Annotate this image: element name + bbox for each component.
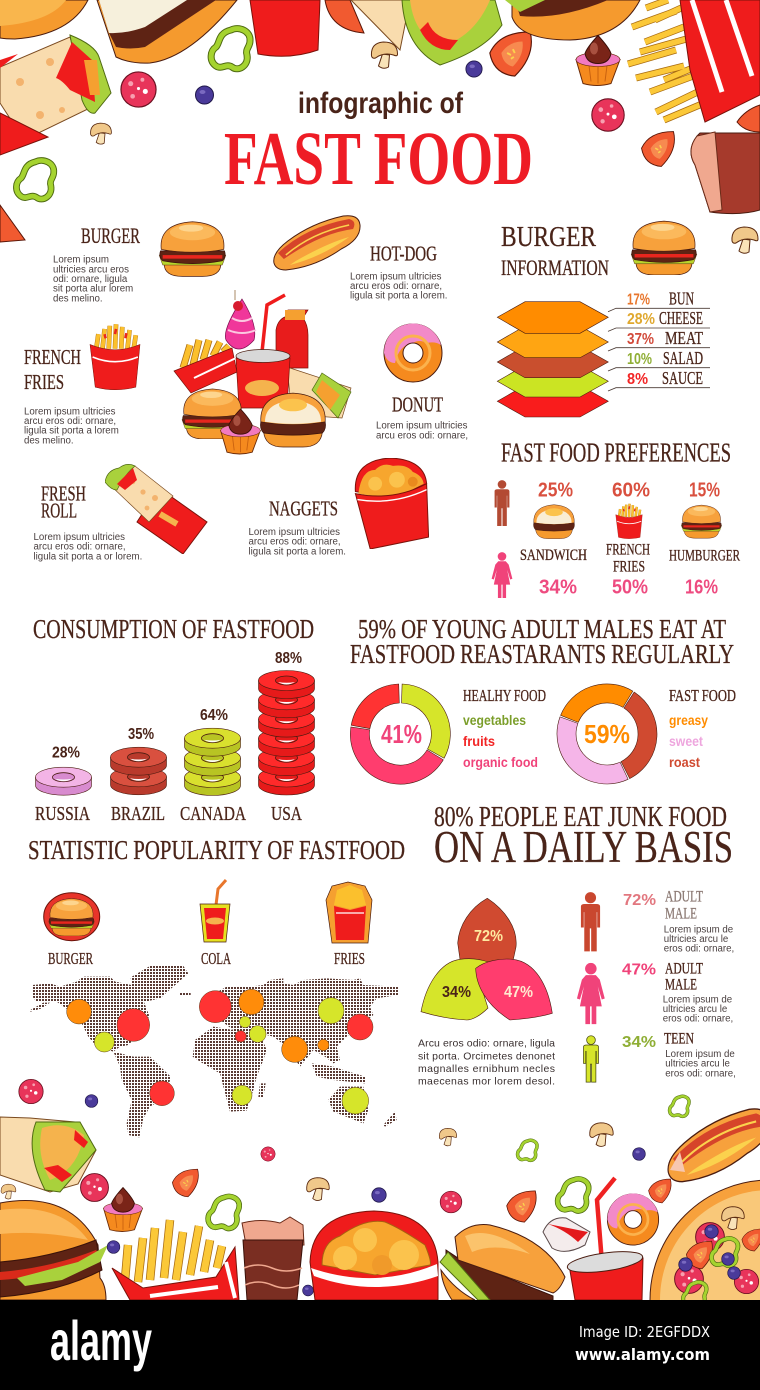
chart labels <box>627 288 703 388</box>
male percentages: 60% <box>612 480 650 502</box>
title <box>224 87 533 201</box>
panel: fast food preferences <box>492 438 740 598</box>
panel: burger information <box>497 221 710 417</box>
footer bar <box>0 1300 760 1390</box>
burger information heading <box>501 221 609 280</box>
french fries item: FRENCH <box>24 345 81 369</box>
donut chart: healthy food: 41% <box>381 719 422 749</box>
adult female row: MALE <box>665 976 697 993</box>
teen row: eros odi: ornare, <box>665 1068 736 1079</box>
adult male row <box>581 889 734 955</box>
donut item: DONUT <box>392 393 443 417</box>
burger item: odi: ornare, ligula <box>53 274 128 285</box>
icon: fries: FRIES <box>334 949 365 968</box>
Russia donut stack: RUSSIA <box>35 803 90 825</box>
adult male row: eros odi: ornare, <box>664 944 734 955</box>
chart labels: 28% <box>627 311 655 328</box>
food labels: FRIES <box>613 559 645 576</box>
french fries item: ligula sit porta a lorem <box>24 426 119 437</box>
petal chart paragraph: maecenas mor lorem desol. <box>418 1076 555 1088</box>
chart labels: SALAD <box>663 348 703 368</box>
hot-dog item: HOT-DOG <box>370 242 437 266</box>
petal chart <box>421 898 552 1020</box>
junk food heading <box>434 802 733 872</box>
icon: cheeseburger <box>631 221 697 275</box>
adult male row: MALE <box>665 905 697 922</box>
chart labels: SAUCE <box>662 368 703 388</box>
french fries item: arcu eros odi: ornare, <box>24 416 116 427</box>
stacked hexagon chart <box>497 302 608 417</box>
male percentages: 25% <box>538 480 573 502</box>
chart labels: MEAT <box>665 328 703 348</box>
alamy logo: alamy <box>50 1309 152 1372</box>
teen row: 34% <box>622 1034 656 1051</box>
USA donut stack <box>258 650 314 825</box>
teen row: Lorem ipsum de <box>665 1049 735 1060</box>
statistic heading: STATISTIC POPULARITY OF FASTFOOD <box>28 835 405 865</box>
adult male row: ultricies arcu le <box>664 934 728 945</box>
naggets item: Lorem ipsum ultricies <box>248 527 340 538</box>
healthy food legend: HEALHY FOOD <box>463 686 546 705</box>
icon: burger <box>44 893 100 968</box>
fast food legend: FAST FOOD <box>669 686 736 705</box>
fast food legend: greasy <box>669 712 708 728</box>
adult male row: Lorem ipsum de <box>664 925 733 936</box>
healthy food legend: fruits <box>463 733 495 749</box>
chart labels: 37% <box>627 331 654 348</box>
panel: consumption of fastfood <box>33 614 314 825</box>
Canada donut stack: 64% <box>200 707 228 724</box>
food icons <box>534 504 722 539</box>
naggets item: NAGGETS <box>269 496 338 520</box>
Brazil donut stack: BRAZIL <box>111 803 165 825</box>
adult female row: ADULT <box>665 960 703 977</box>
female percentages: 50% <box>612 576 648 598</box>
french fries item: FRIES <box>24 370 64 394</box>
donut item: arcu eros odi: ornare, <box>376 430 468 441</box>
food labels: FRENCH <box>606 541 650 558</box>
female percentages: 34% <box>539 576 577 598</box>
fresh roll item: ROLL <box>41 498 77 522</box>
naggets item: arcu eros odi: ornare, <box>248 537 341 548</box>
burger item: des melino. <box>53 293 103 304</box>
donut chart: fast food: 59% <box>584 719 630 749</box>
healthy food legend: vegetables <box>463 712 526 728</box>
petal chart paragraph: magnalles ernibhum necles <box>418 1063 555 1075</box>
chart labels: 10% <box>627 351 652 368</box>
burger item: BURGER <box>81 223 140 248</box>
fast food legend: roast <box>669 754 700 770</box>
central food group <box>174 290 351 454</box>
panel: junk food daily <box>418 802 736 1088</box>
fresh roll item <box>34 464 207 562</box>
petal chart: 72% <box>474 928 503 945</box>
adult female row: 47% <box>622 961 656 978</box>
donut chart: fast food <box>557 684 657 784</box>
petal chart: 47% <box>504 984 533 1001</box>
top food border <box>0 0 760 253</box>
hot-dog item: Lorem ipsum ultricies <box>350 271 442 282</box>
petal chart paragraph: Arcu eros odio: ornare, ligula <box>418 1038 555 1050</box>
adult female row: eros odi: ornare, <box>663 1014 733 1025</box>
Brazil donut stack <box>110 726 166 825</box>
petal chart paragraph <box>418 1038 555 1088</box>
title: FAST FOOD <box>224 117 533 201</box>
Russia donut stack <box>35 745 92 825</box>
Canada donut stack <box>180 707 246 825</box>
adult male row: ADULT <box>665 889 703 906</box>
Brazil donut stack: 35% <box>128 726 154 743</box>
fresh roll item: Lorem ipsum ultricies <box>34 532 125 543</box>
burger information heading: INFORMATION <box>501 255 609 280</box>
adult female row: Lorem ipsum de <box>663 994 732 1005</box>
teen row: TEEN <box>664 1030 694 1047</box>
dotted world map <box>29 966 398 1137</box>
icon: burger: BURGER <box>48 949 93 968</box>
panel: statistic popularity <box>28 835 405 1137</box>
fresh roll item: arcu eros odi: ornare, <box>34 542 126 553</box>
donut chart: healthy food <box>350 684 450 784</box>
young adult heading <box>350 614 734 669</box>
burger item: sit porta alur lorem <box>53 284 133 295</box>
french fries item: Lorem ipsum ultricies <box>24 406 116 417</box>
title: infographic of <box>298 87 464 120</box>
icon: man <box>495 480 509 526</box>
hot-dog item: arcu eros odi: ornare, <box>350 281 442 292</box>
adult female row <box>577 960 733 1025</box>
food labels: SANDWICH <box>520 547 587 564</box>
chart labels: BUN <box>669 288 694 308</box>
burger item: Lorem ipsum <box>53 255 109 266</box>
male percentages <box>538 480 720 502</box>
donut item <box>376 324 468 441</box>
female percentages <box>539 576 718 598</box>
male percentages: 15% <box>689 480 720 502</box>
panel: young adult males <box>350 614 736 784</box>
image id text: www.alamy.com <box>575 1345 710 1364</box>
consumption heading: CONSUMPTION OF FASTFOOD <box>33 614 314 644</box>
french fries item: des melino. <box>24 435 74 446</box>
healthy food legend: organic food <box>463 754 538 770</box>
bottom food border <box>0 1079 760 1390</box>
healthy food legend <box>463 686 546 770</box>
chart leader lines <box>608 308 710 391</box>
chart labels: CHEESE <box>659 308 703 328</box>
USA donut stack: 88% <box>275 650 302 667</box>
icon: cola: COLA <box>201 949 231 968</box>
naggets item <box>248 458 429 557</box>
chart labels: 17% <box>627 291 650 308</box>
petal chart paragraph: sit porta. Orcimetes denonet <box>418 1050 555 1062</box>
teen row <box>584 1030 736 1082</box>
panel: food menu <box>24 216 468 562</box>
hot-dog item: ligula sit porta a lorem. <box>350 291 447 302</box>
Russia donut stack: 28% <box>52 745 80 762</box>
icon: woman <box>492 552 512 598</box>
fast food legend: sweet <box>669 733 703 749</box>
teen row: ultricies arcu le <box>665 1059 730 1070</box>
french fries item <box>24 324 140 446</box>
fast food legend <box>669 686 736 770</box>
adult male row: 72% <box>623 892 656 909</box>
chart labels: 8% <box>627 371 648 388</box>
image id text <box>575 1323 710 1364</box>
icon: cola <box>200 880 231 968</box>
burger item: ultricies arcu eros <box>53 264 129 275</box>
image id text: Image ID: 2EGFDDX <box>579 1323 710 1341</box>
fresh roll item: FRESH <box>41 482 86 506</box>
Canada donut stack: CANADA <box>180 803 246 825</box>
naggets item: ligula sit porta a lorem. <box>248 546 346 557</box>
female percentages: 16% <box>685 576 718 598</box>
USA donut stack: USA <box>271 803 302 825</box>
food labels <box>520 541 740 576</box>
burger information heading: BURGER <box>501 221 597 253</box>
fresh roll item: ligula sit porta a or lorem. <box>34 551 142 562</box>
petal chart: 34% <box>442 984 471 1001</box>
donut item: Lorem ipsum ultricies <box>376 421 468 432</box>
hot-dog item <box>274 216 447 302</box>
adult female row: ultricies arcu le <box>663 1004 727 1015</box>
icon: fries <box>326 882 372 968</box>
burger item <box>53 222 226 304</box>
